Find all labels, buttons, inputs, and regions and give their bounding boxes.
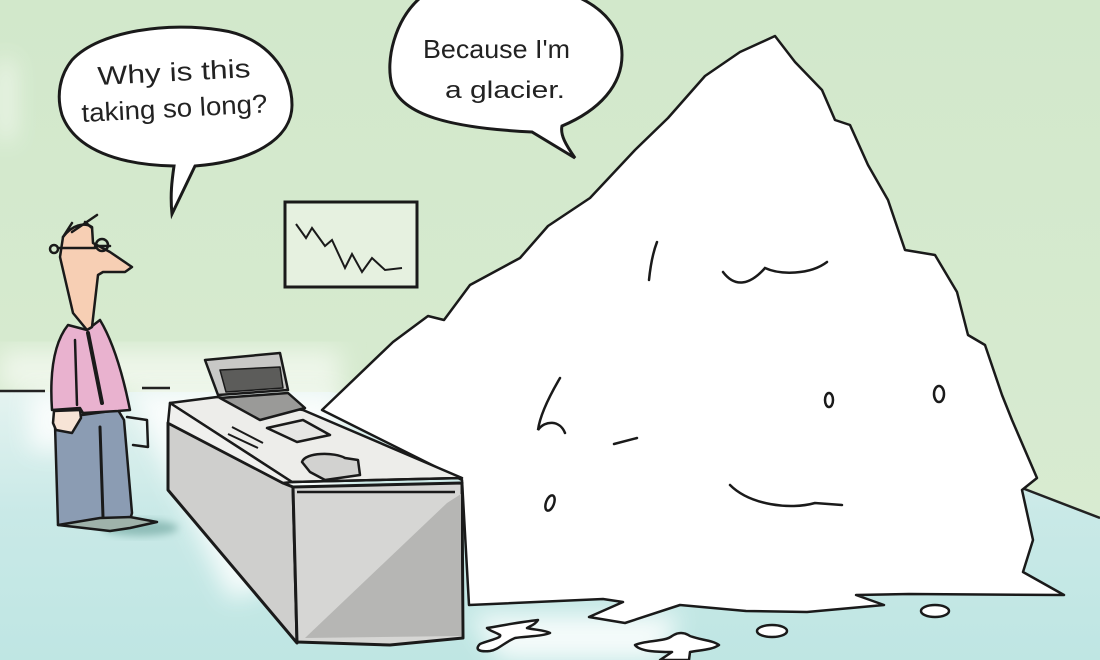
laptop [205, 353, 305, 420]
object on desk [302, 454, 360, 480]
head [60, 225, 132, 330]
speech text: Because I'm [423, 34, 570, 64]
desk front [293, 483, 463, 645]
speech bubble: glacier [390, 0, 622, 158]
glacier [322, 36, 1064, 623]
man [50, 215, 178, 536]
floor [0, 392, 1100, 660]
paper on desk [267, 420, 330, 442]
desk marks [228, 427, 263, 448]
right hand and paper [127, 417, 148, 447]
desk [168, 397, 463, 645]
shadow [102, 520, 178, 536]
hair and glasses [58, 215, 110, 248]
shirt [51, 320, 130, 413]
speech bubble: man: taking so long? [81, 88, 268, 128]
shoes [58, 517, 157, 531]
glacier face details [538, 242, 944, 512]
speech text: Why is this [97, 53, 251, 91]
trousers [55, 410, 132, 525]
pale wall haze [0, 350, 340, 392]
left hand [53, 410, 81, 433]
white glow around scene [0, 60, 680, 660]
speech bubble: man [59, 27, 292, 214]
speech bubble: glacier: a glacier. [445, 77, 565, 104]
desk side [168, 423, 297, 643]
tie [88, 333, 102, 403]
puddles [478, 605, 949, 660]
chart on wall [285, 202, 417, 287]
desk top [170, 397, 462, 482]
skirting line [0, 388, 1100, 518]
